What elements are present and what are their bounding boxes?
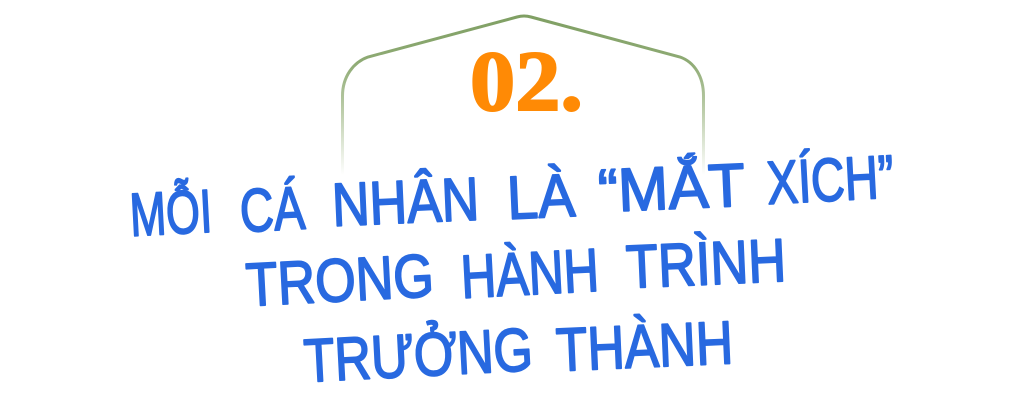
- title line 2: [244, 226, 787, 319]
- house-shaped frame outline: [342, 16, 704, 175]
- title line 1: MỖI: [128, 177, 214, 249]
- title line 3: THÀNH: [555, 308, 734, 384]
- title line 2: TRÌNH: [625, 226, 787, 301]
- title: [128, 142, 896, 395]
- title line 2: TRONG: [244, 241, 435, 319]
- title line 3: [302, 308, 734, 395]
- title line 2: HÀNH: [459, 236, 600, 311]
- title line 1: LÀ: [506, 161, 577, 232]
- title line 1: CÁ: [238, 174, 307, 245]
- title line 1: “MẮT: [597, 151, 746, 225]
- title line 3: TRƯỞNG: [302, 315, 534, 395]
- title line 1: XÍCH”: [765, 142, 896, 217]
- title line 1: NHÂN: [331, 165, 480, 239]
- title line 1: [128, 142, 896, 249]
- section number: 02.: [470, 33, 583, 129]
